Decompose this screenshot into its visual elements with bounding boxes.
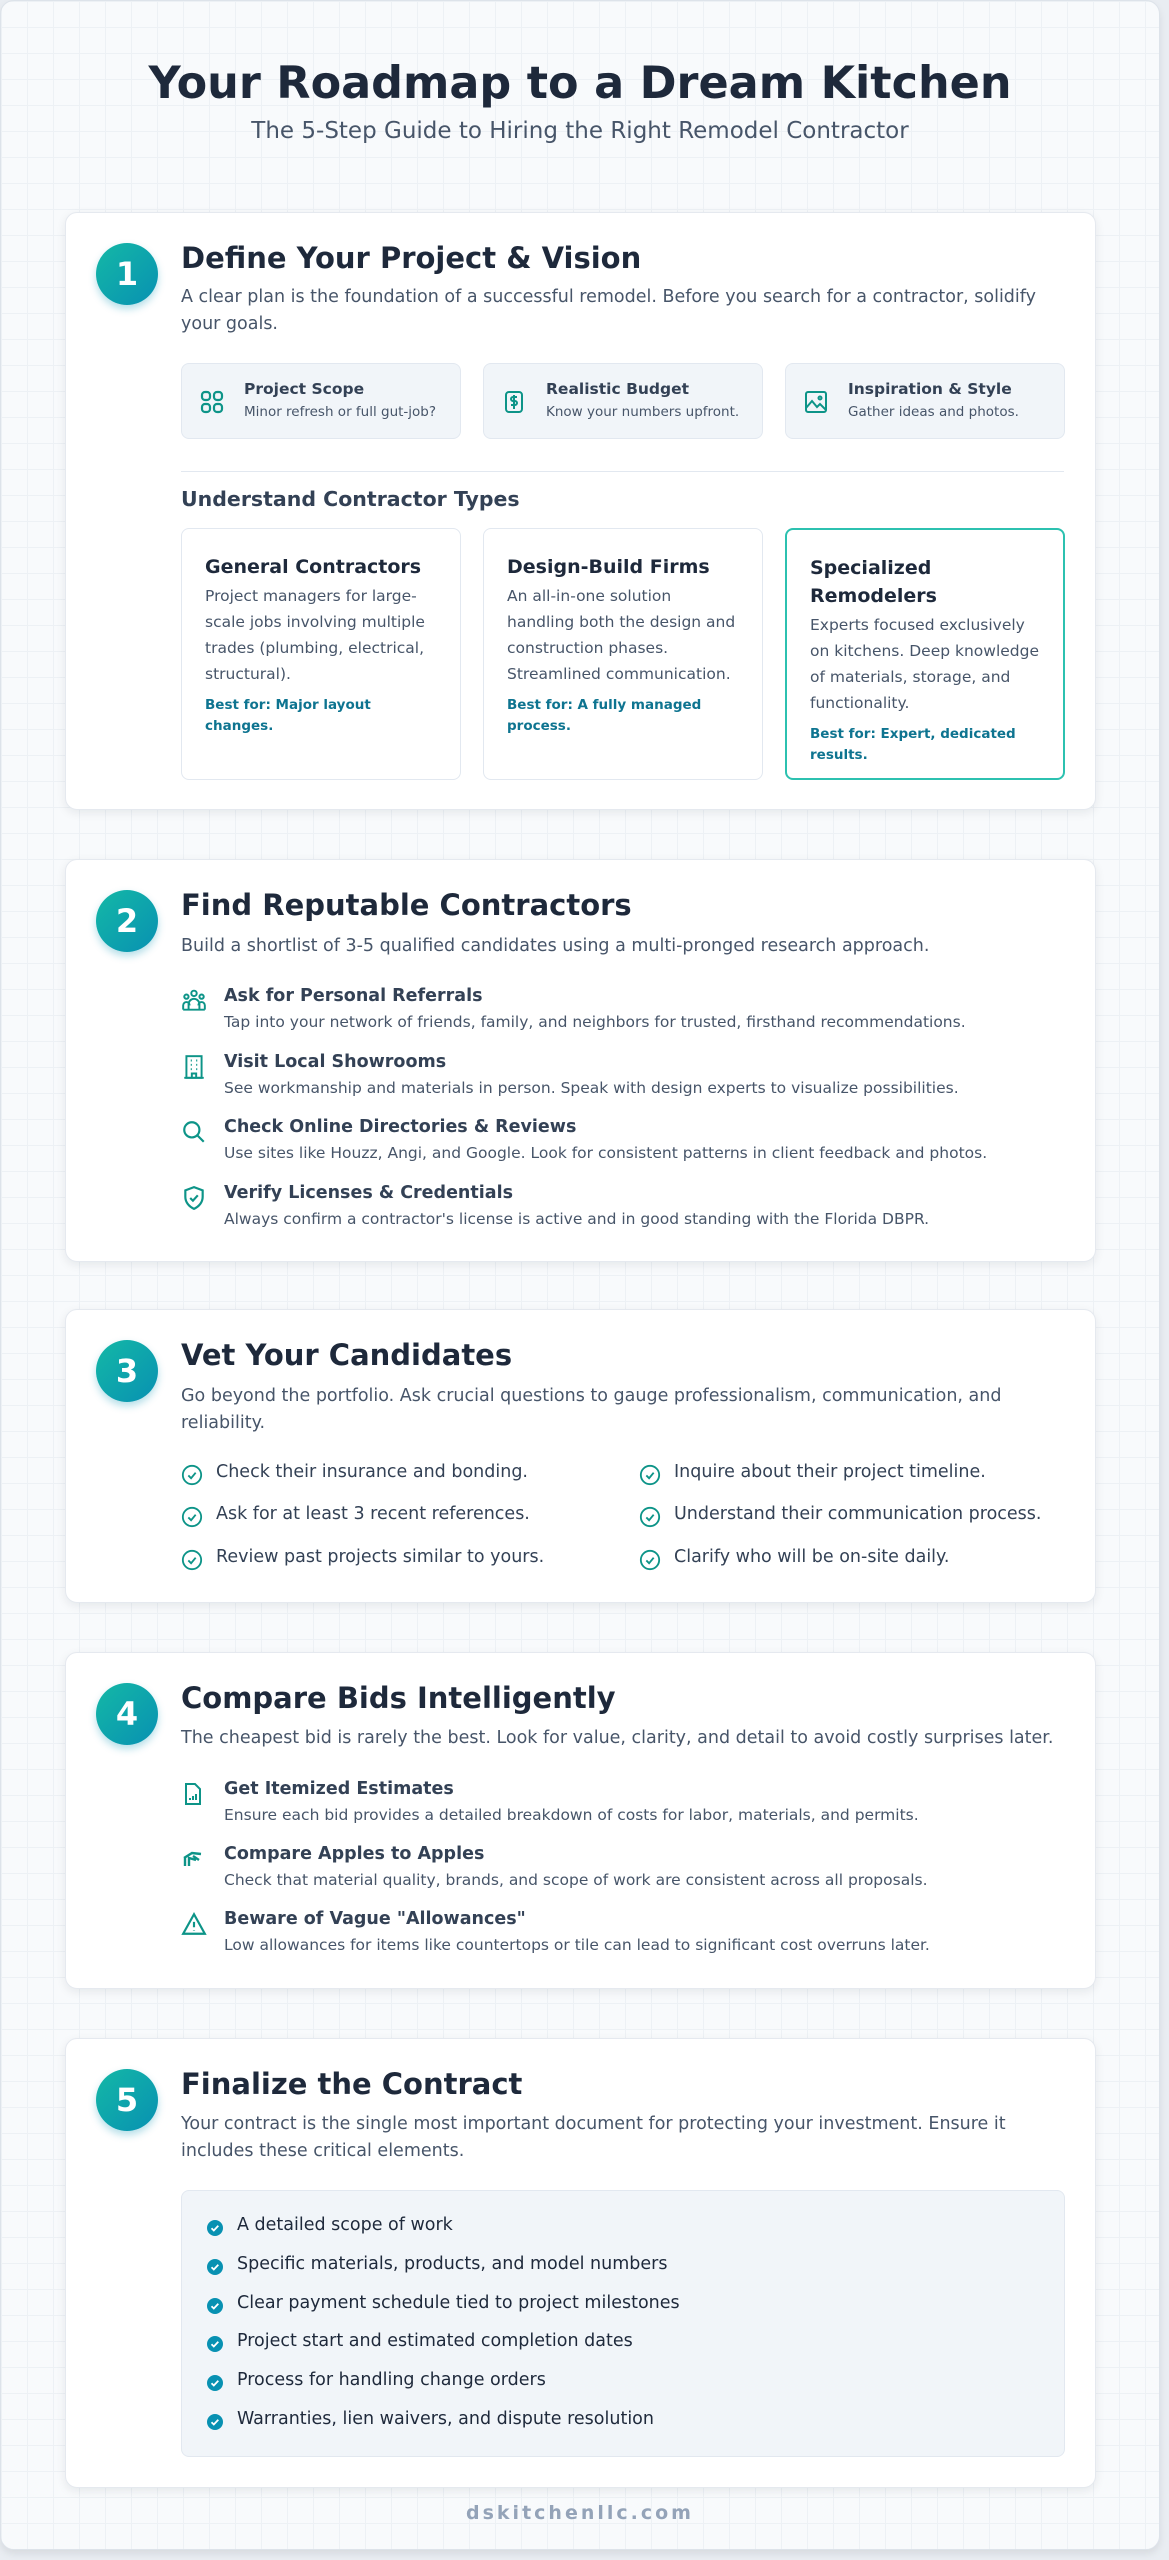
contract checklist box: A detailed scope of work — [237, 2215, 453, 2235]
heading 2: Find Reputable Contractors — [181, 888, 632, 922]
box: realistic budget: Realistic Budget — [546, 380, 689, 398]
type card: specialized: Specialized Remodelers — [810, 557, 937, 607]
contract checklist box: Process for handling change orders — [237, 2370, 546, 2390]
item: referrals: Ask for Personal Referrals — [224, 986, 482, 1006]
contract checklist box: Specific materials, products, and model numbers — [237, 2254, 667, 2274]
type card: specialized — [785, 528, 1065, 780]
checklist: Ask for at least 3 recent references. — [216, 1504, 530, 1524]
type card: general: Best for: Major layout changes. — [205, 697, 371, 734]
item: online reviews — [183, 1117, 987, 1162]
box: project scope — [181, 363, 461, 439]
description 2: Build a shortlist of 3-5 qualified candidates using a multi-pronged research approach. — [181, 936, 929, 956]
title: Your Roadmap to a Dream Kitchen — [148, 58, 1012, 109]
item: referrals: Tap into your network of friends, family, and neighbors for trusted, firsthand recommendations. — [224, 1013, 966, 1031]
heading 1: Define Your Project & Vision — [181, 241, 641, 275]
heading 3: Vet Your Candidates — [181, 1338, 512, 1372]
item: showrooms: See workmanship and materials in person. Speak with design experts to visualize possibilities. — [224, 1079, 959, 1097]
box: inspiration: Inspiration & Style — [848, 380, 1012, 398]
item: itemized: Get Itemized Estimates — [224, 1779, 454, 1799]
box: realistic budget: Know your numbers upfront. — [546, 404, 739, 420]
item: showrooms: Visit Local Showrooms — [224, 1052, 446, 1072]
step number 3: 3 — [116, 1352, 138, 1390]
item: showrooms — [184, 1052, 959, 1097]
description 1: A clear plan is the foundation of a successful remodel. Before you search for a contractor, solidify your goals. — [181, 287, 1036, 334]
type card: design-build: Best for: A fully managed process. — [507, 697, 701, 734]
contract checklist box: Project start and estimated completion dates — [237, 2331, 633, 2351]
item: licenses: Always confirm a contractor's license is active and in good standing with the Florida DBPR. — [224, 1210, 929, 1228]
box: project scope: Project Scope — [244, 380, 364, 398]
type card: general: Project managers for large-scale jobs involving multiple trades (plumbing, electrical, structural). — [205, 587, 425, 683]
type card: general: General Contractors — [205, 556, 421, 578]
panel: step 5 — [65, 2038, 1096, 2488]
type card: specialized: Best for: Expert, dedicated results. — [810, 726, 1016, 763]
step number 1 — [96, 243, 158, 305]
type card: general — [181, 528, 461, 780]
heading 5: Finalize the Contract — [181, 2067, 522, 2101]
step number 2 — [96, 890, 158, 952]
checklist — [182, 1462, 1041, 1570]
panel: step 2 — [65, 859, 1096, 1262]
description 5: Your contract is the single most important document for protecting your investment. Ensure it includes these critical elements. — [181, 2114, 1006, 2161]
item: licenses: Verify Licenses & Credentials — [224, 1183, 513, 1203]
panel: step 3 — [65, 1309, 1096, 1603]
item: referrals — [182, 986, 966, 1031]
item: allowances: Low allowances for items like countertops or tile can lead to significant cost overruns later. — [224, 1936, 930, 1954]
panel: step 1 — [65, 212, 1096, 810]
step number 3 — [96, 1340, 158, 1402]
checklist: Review past projects similar to yours. — [216, 1547, 544, 1567]
checklist: Clarify who will be on-site daily. — [674, 1547, 949, 1567]
contract checklist box — [181, 2190, 1065, 2457]
item: licenses — [184, 1183, 929, 1228]
item: itemized — [185, 1779, 919, 1824]
item: allowances — [181, 1909, 930, 1954]
box: realistic budget — [483, 363, 763, 439]
item: apples: Check that material quality, brands, and scope of work are consistent across all proposals. — [224, 1871, 928, 1889]
box: inspiration: Gather ideas and photos. — [848, 404, 1019, 420]
subtitle: The 5-Step Guide to Hiring the Right Remodel Contractor — [251, 118, 909, 144]
step number 5 — [96, 2069, 158, 2131]
box: project scope: Minor refresh or full gut-job? — [244, 404, 436, 420]
item: itemized: Ensure each bid provides a detailed breakdown of costs for labor, materials, and permits. — [224, 1806, 919, 1824]
step number 1: 1 — [116, 255, 138, 293]
heading 4: Compare Bids Intelligently — [181, 1681, 616, 1715]
description 3: Go beyond the portfolio. Ask crucial questions to gauge professionalism, communication, and reliability. — [181, 1386, 1001, 1433]
type card: design-build: Design-Build Firms — [507, 556, 710, 578]
item: online reviews: Check Online Directories & Reviews — [224, 1117, 576, 1137]
checklist: Inquire about their project timeline. — [674, 1462, 986, 1482]
type card: specialized: Experts focused exclusively on kitchens. Deep knowledge of materials, storage, and functionality. — [810, 616, 1039, 712]
step number 4: 4 — [116, 1695, 138, 1733]
checklist: Understand their communication process. — [674, 1504, 1041, 1524]
item: allowances: Beware of Vague "Allowances" — [224, 1909, 526, 1929]
panel: step 4 — [65, 1652, 1096, 1989]
type card: design-build — [483, 528, 763, 780]
item: apples — [183, 1844, 928, 1889]
item: apples: Compare Apples to Apples — [224, 1844, 484, 1864]
description 4: The cheapest bid is rarely the best. Look for value, clarity, and detail to avoid costly surprises later. — [181, 1728, 1053, 1748]
contract checklist box: Clear payment schedule tied to project milestones — [237, 2293, 680, 2313]
box: inspiration — [785, 363, 1065, 439]
type card: design-build: An all-in-one solution handling both the design and construction phases. Streamlined communication. — [507, 587, 735, 683]
footer: dskitchenllc.com — [466, 2502, 694, 2524]
item: online reviews: Use sites like Houzz, Angi, and Google. Look for consistent patterns in client feedback and photos. — [224, 1144, 987, 1162]
subheading: contractor types: Understand Contractor Types — [181, 487, 520, 511]
step number 5: 5 — [116, 2081, 138, 2119]
checklist: Check their insurance and bonding. — [216, 1462, 528, 1482]
contract checklist box: Warranties, lien waivers, and dispute resolution — [237, 2409, 654, 2429]
step number 2: 2 — [116, 902, 138, 940]
step number 4 — [96, 1683, 158, 1745]
